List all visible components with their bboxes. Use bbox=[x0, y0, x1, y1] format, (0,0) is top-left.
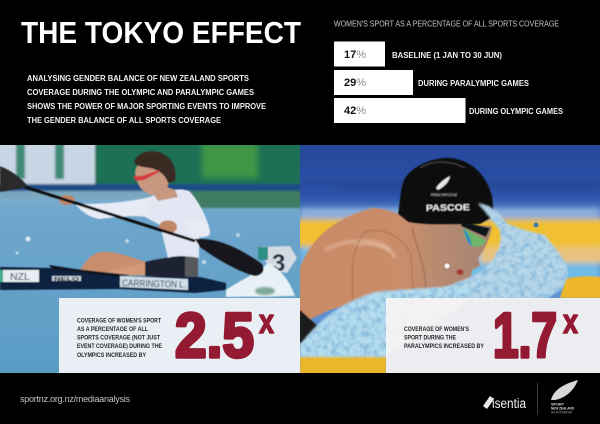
photo: swimmer bbox=[295, 145, 600, 375]
intro text block bbox=[27, 73, 266, 125]
bar: olympic 42%: DURING OLYMPIC GAMES bbox=[469, 106, 563, 116]
legs bbox=[80, 252, 150, 275]
swim cap bbox=[398, 158, 494, 224]
NZL label bbox=[0, 270, 39, 282]
cap name: PASCOE bbox=[426, 202, 470, 213]
callout text: OLYMPICS INCREASED BY bbox=[77, 352, 147, 359]
callout text: EVENT COVERAGE) DURING THE bbox=[77, 343, 163, 350]
bar: baseline 17% bbox=[334, 42, 502, 66]
callout text bbox=[404, 326, 485, 350]
isentia logo: isentia bbox=[492, 396, 526, 411]
title: THE TOKYO EFFECT bbox=[21, 16, 301, 50]
goggles bbox=[461, 222, 490, 237]
water highlights bbox=[26, 236, 30, 242]
Sport NZ logo: IHI AOTEAROA bbox=[551, 410, 573, 414]
Sport NZ logo: SPORT bbox=[551, 402, 565, 406]
intro text block: COVERAGE DURING THE OLYMPIC AND PARALYMPIC GAMES bbox=[27, 87, 254, 97]
photo: kayaker: NELO bbox=[54, 277, 79, 283]
bar: paralympic 29% bbox=[334, 70, 529, 95]
head bbox=[134, 164, 170, 196]
name label bbox=[120, 276, 188, 290]
photo: swimmer: PARALYMPICS NZ bbox=[431, 193, 458, 197]
big number 1.7x: 1.7 bbox=[493, 301, 557, 371]
hands bbox=[59, 195, 75, 205]
Sport NZ logo: NEW ZEALAND bbox=[551, 406, 574, 410]
bar: baseline 17%: BASELINE (1 JAN TO 30 JUN) bbox=[392, 50, 502, 60]
bar chart: women's sport percentage of coverage bbox=[334, 18, 563, 123]
swimmer body bbox=[298, 208, 492, 325]
bar: olympic 42%: 42% bbox=[344, 105, 366, 117]
mouth bbox=[456, 269, 464, 275]
bar: paralympic 29%: DURING PARALYMPIC GAMES bbox=[418, 78, 529, 88]
Sport NZ logo bbox=[551, 380, 578, 414]
water splash bbox=[300, 203, 568, 357]
intro text block: SHOWS THE POWER OF MAJOR SPORTING EVENTS TO IMPROVE bbox=[27, 101, 266, 111]
callout text: AS A PERCENTAGE OF ALL bbox=[77, 326, 148, 333]
footer bar bbox=[0, 373, 600, 424]
photo: kayaker: NZL bbox=[10, 271, 30, 283]
swimsuit bbox=[300, 309, 318, 344]
intro text block: THE GENDER BALANCE OF ALL SPORTS COVERAGE bbox=[27, 115, 221, 125]
torso bbox=[145, 189, 210, 258]
callout text: COVERAGE OF WOMEN'S bbox=[404, 326, 470, 333]
bar: baseline 17%: 17% bbox=[344, 49, 366, 61]
callout text: COVERAGE OF WOMEN'S SPORT bbox=[77, 318, 161, 324]
callout text: SPORT DURING THE bbox=[404, 334, 457, 342]
icon: silver fern bbox=[551, 380, 578, 400]
lane rope bbox=[560, 276, 600, 298]
NELO label bbox=[52, 276, 81, 281]
shorts bbox=[144, 256, 186, 278]
chart heading: WOMEN'S SPORT AS A PERCENTAGE OF ALL SPORTS COVERAGE bbox=[334, 18, 559, 28]
callout: Olympics 2.5x bbox=[59, 298, 300, 373]
number sign bbox=[258, 246, 297, 273]
intro text block: ANALYSING GENDER BALANCE OF NEW ZEALAND SPORTS bbox=[27, 73, 249, 83]
callout: Paralympics 1.7x bbox=[386, 298, 600, 373]
photo: kayaker: CARRINGTON L. bbox=[122, 278, 186, 291]
big number 2.5x: x bbox=[259, 303, 274, 341]
callout text: PARALYMPICS INCREASED BY bbox=[404, 343, 485, 350]
photo: kayaker: 3 bbox=[272, 250, 285, 277]
big number 1.7x: x bbox=[563, 303, 578, 341]
cap logo bbox=[436, 176, 450, 190]
callout text: SPORTS COVERAGE (NOT JUST bbox=[77, 334, 160, 342]
footer url: sportnz.org.nz/mediaanalysis bbox=[20, 394, 130, 404]
paddle bbox=[0, 166, 28, 192]
big number 2.5x: 2.5 bbox=[175, 301, 254, 371]
bar: paralympic 29%: 29% bbox=[344, 77, 366, 89]
callout text bbox=[77, 318, 163, 359]
bar: olympic 42% bbox=[334, 98, 563, 123]
kayak hull bbox=[0, 267, 226, 293]
splash bbox=[226, 263, 295, 297]
photo: kayaker bbox=[0, 142, 307, 373]
arm bbox=[75, 197, 150, 219]
